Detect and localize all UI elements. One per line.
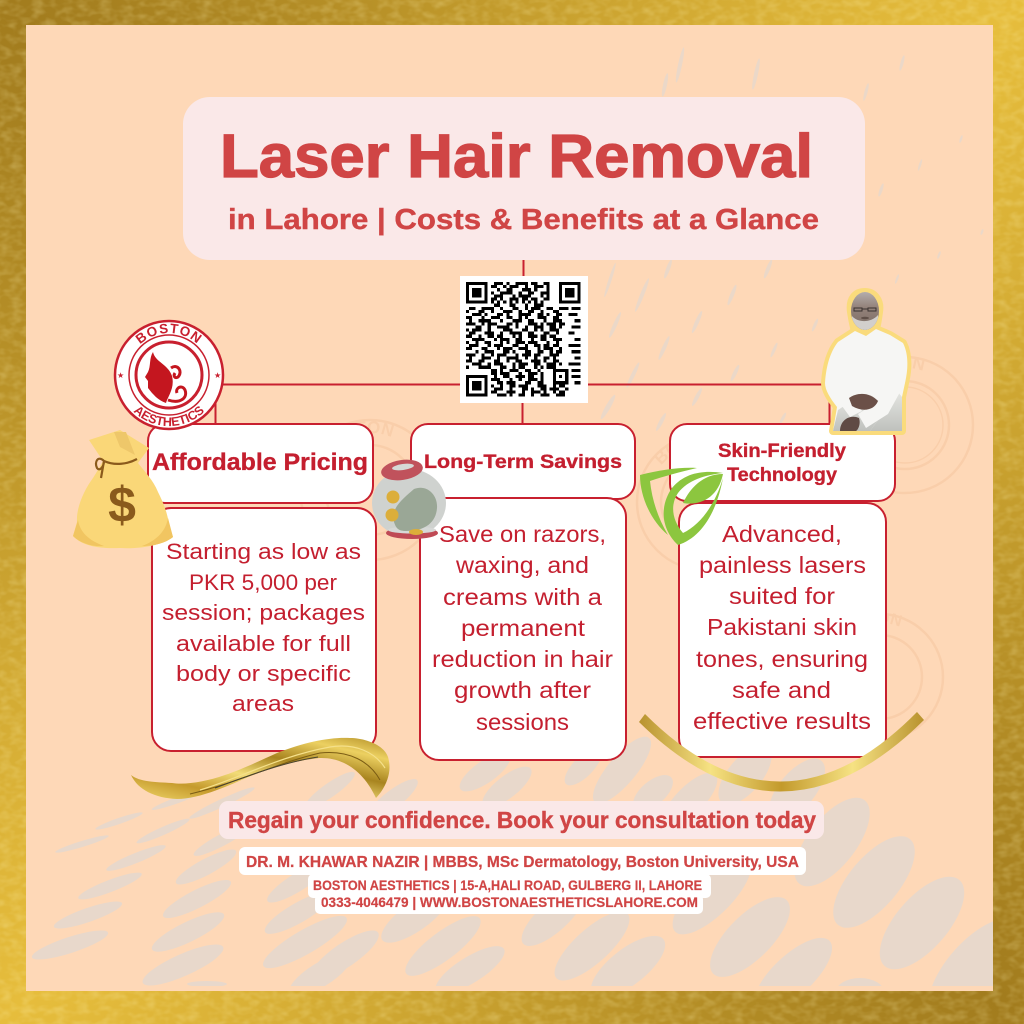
body card: Pakistani skin bbox=[707, 614, 857, 640]
heading card: Skin-Friendly bbox=[718, 440, 846, 462]
call to action: Regain your confidence. Book your consultation today bbox=[228, 807, 816, 833]
heading card: Long-Term Savings bbox=[424, 451, 622, 473]
icon: savings jar bbox=[372, 457, 446, 539]
icon: Boston Aesthetics logo: AESTHETICS bbox=[133, 406, 204, 426]
panel: long-term savings bbox=[411, 424, 635, 760]
watermark stamps: BOSTON bbox=[655, 446, 669, 464]
icon: Boston Aesthetics logo: ★ bbox=[214, 371, 221, 380]
heading card: Affordable Pricing bbox=[152, 449, 368, 476]
body card: growth after bbox=[454, 677, 591, 703]
doctor credentials: DR. M. KHAWAR NAZIR | MBBS, MSc Dermatology, Boston University, USA bbox=[246, 854, 799, 871]
body card: Starting as low as bbox=[166, 539, 361, 564]
decoration: gold hair swoosh bbox=[131, 738, 390, 799]
doctor credentials bbox=[239, 847, 806, 875]
QR code bbox=[460, 276, 588, 403]
dollar sign: $ bbox=[108, 477, 136, 533]
body card: waxing, and bbox=[455, 552, 589, 578]
watermark stamps: BOSTON bbox=[356, 422, 394, 436]
body card: effective results bbox=[693, 708, 871, 734]
clinic address and contact: 0333-4046479 | WWW.BOSTONAESTHETICSLAHORE.COM bbox=[321, 895, 698, 910]
heading card: Technology bbox=[727, 464, 837, 486]
clinic address and contact bbox=[308, 874, 711, 914]
subheading: in Lahore | Costs & Benefits at a Glance bbox=[228, 204, 819, 236]
icon: money bag bbox=[73, 430, 173, 548]
body card: painless lasers bbox=[699, 552, 866, 578]
connector lines bbox=[216, 260, 830, 426]
heading: Laser Hair Removal bbox=[220, 122, 813, 190]
background pattern: rain streaks bbox=[599, 47, 984, 432]
body card: suited for bbox=[729, 583, 835, 609]
body card: sessions bbox=[476, 709, 569, 735]
clinic address and contact: BOSTON AESTHETICS | 15-A,HALI ROAD, GULBERG II, LAHORE bbox=[313, 878, 702, 893]
body card: Save on razors, bbox=[439, 521, 606, 547]
body card: tones, ensuring bbox=[696, 646, 868, 672]
watermark stamps bbox=[300, 356, 974, 739]
icon: doctor portrait bbox=[825, 291, 907, 431]
heading card bbox=[670, 424, 895, 501]
heading card bbox=[148, 424, 373, 503]
body card: session; packages bbox=[162, 600, 365, 625]
icon: Boston Aesthetics logo: BOSTON bbox=[135, 324, 202, 344]
body card bbox=[420, 498, 626, 760]
watermark stamps: BOSTON bbox=[913, 359, 924, 370]
body card: Advanced, bbox=[722, 521, 842, 547]
body card bbox=[152, 508, 376, 751]
heading card bbox=[411, 424, 635, 499]
body card: reduction in hair bbox=[432, 646, 613, 672]
body card: permanent bbox=[461, 615, 586, 641]
icon: green leaf shield bbox=[640, 468, 723, 545]
call to action bbox=[219, 801, 824, 839]
decoration: gold smile arc bbox=[639, 712, 924, 792]
panel: affordable pricing bbox=[148, 424, 376, 751]
watermark stamps: BOSTON bbox=[887, 614, 902, 626]
body card: safe and bbox=[732, 677, 831, 703]
panel: skin-friendly technology bbox=[670, 424, 895, 757]
title box bbox=[183, 97, 865, 260]
body card: areas bbox=[232, 691, 294, 716]
body card: creams with a bbox=[443, 584, 602, 610]
body card: body or specific bbox=[176, 661, 351, 686]
body card: available for full bbox=[176, 631, 351, 656]
body card bbox=[679, 503, 886, 757]
icon: Boston Aesthetics logo: ★ bbox=[117, 371, 124, 380]
body card: PKR 5,000 per bbox=[189, 570, 338, 595]
icon: Boston Aesthetics logo bbox=[114, 320, 224, 430]
